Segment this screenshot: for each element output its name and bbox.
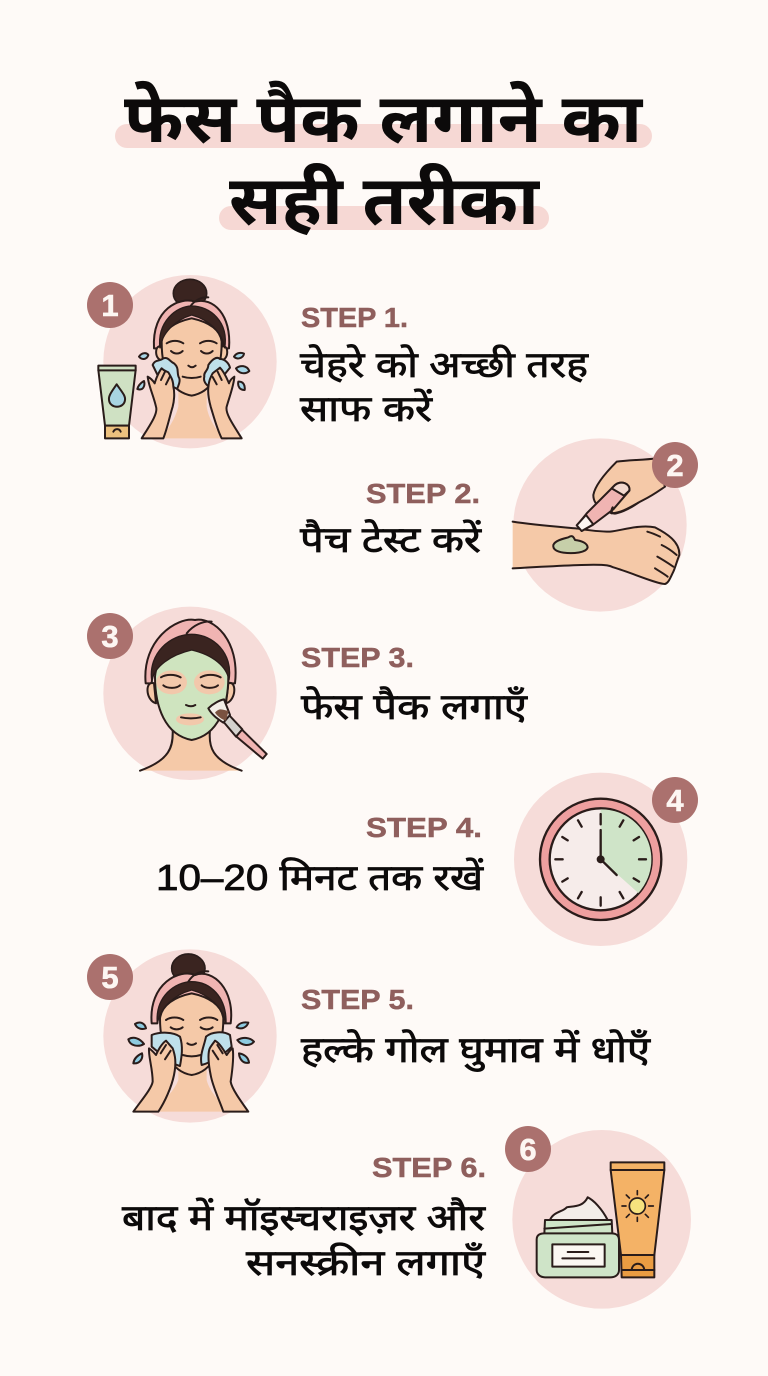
step 1 text bbox=[300, 302, 589, 429]
step 4 text: STEP 4. bbox=[366, 812, 482, 843]
step 5 illustration: rinsing face bbox=[103, 949, 277, 1123]
step 4 text: 10–20 मिनट तक रखें bbox=[156, 857, 484, 898]
step 3 text: फेस पैक लगाएँ bbox=[301, 685, 528, 727]
step 2 text bbox=[300, 478, 482, 560]
step 2 text: STEP 2. bbox=[366, 478, 480, 509]
title: फेस पैक लगाने का bbox=[124, 81, 644, 157]
title: सही तरीका bbox=[229, 163, 541, 239]
badge 2 bbox=[652, 442, 698, 488]
step 5 text bbox=[301, 984, 651, 1072]
badge 6: 6 bbox=[519, 1132, 537, 1167]
step 2 illustration: patch test bbox=[513, 438, 687, 612]
step 6 text: STEP 6. bbox=[372, 1152, 486, 1183]
badge 3 bbox=[87, 613, 133, 659]
step 5 text: STEP 5. bbox=[301, 984, 414, 1015]
step 1 text: STEP 1. bbox=[301, 302, 408, 333]
step 6 illustration: moisturiser and sunscreen bbox=[512, 1130, 691, 1309]
step 6 text: सनस्क्रीन लगाएँ bbox=[246, 1241, 486, 1283]
badge 4: 4 bbox=[666, 783, 684, 818]
badge 1: 1 bbox=[101, 288, 119, 323]
step 5 text: हल्के गोल घुमाव में धोएँ bbox=[301, 1028, 651, 1072]
step 3 illustration: applying pack bbox=[103, 607, 277, 780]
step 3 text bbox=[301, 642, 528, 727]
step 3 text: STEP 3. bbox=[301, 642, 414, 673]
badge 6 bbox=[505, 1126, 551, 1172]
step 1 text: साफ करें bbox=[300, 388, 433, 429]
step 4 text bbox=[156, 812, 484, 898]
badge 2: 2 bbox=[666, 448, 684, 483]
step 1 illustration: cleansing face bbox=[98, 275, 277, 448]
step 4 illustration: clock bbox=[514, 773, 687, 946]
step 6 text bbox=[122, 1152, 486, 1283]
badge 5: 5 bbox=[101, 960, 119, 995]
step 1 text: चेहरे को अच्छी तरह bbox=[300, 344, 589, 385]
badge 4 bbox=[652, 777, 698, 823]
badge 5 bbox=[87, 954, 133, 1000]
step 6 text: बाद में मॉइस्चराइज़र और bbox=[122, 1197, 486, 1238]
badge 1 bbox=[87, 282, 133, 328]
badge 3: 3 bbox=[101, 619, 119, 654]
title bbox=[115, 81, 652, 239]
step 2 text: पैच टेस्ट करें bbox=[300, 519, 482, 560]
